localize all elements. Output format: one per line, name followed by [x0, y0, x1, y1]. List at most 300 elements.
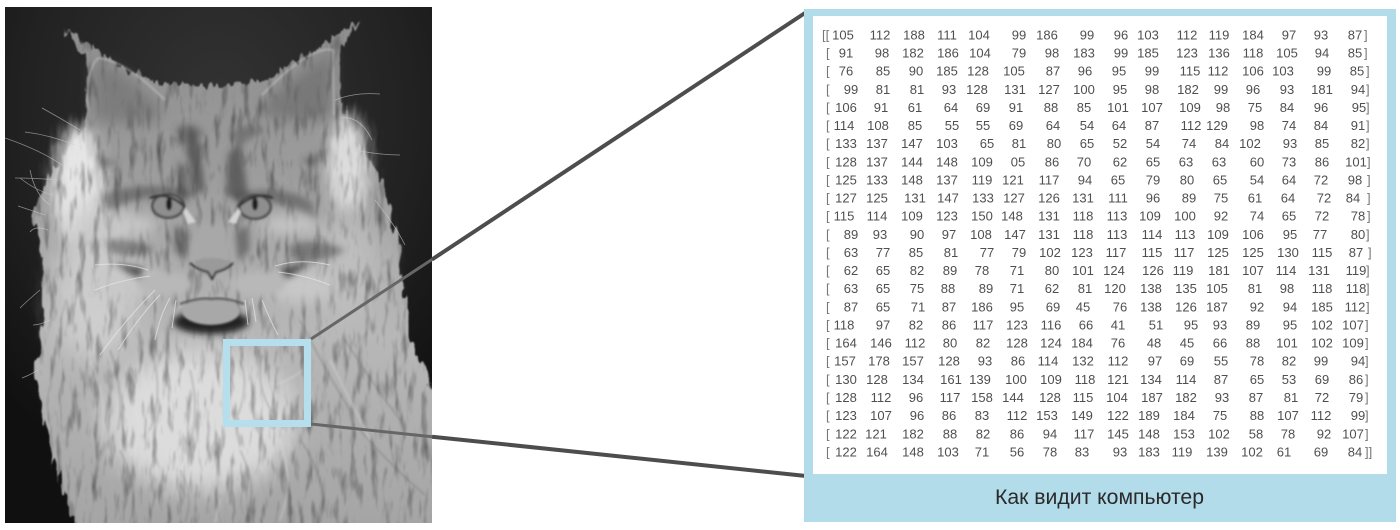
matrix numbers: 105 [1206, 281, 1228, 296]
matrix brackets: ] [1366, 118, 1370, 133]
matrix numbers: 113 [1107, 209, 1127, 224]
matrix brackets: [ [826, 82, 830, 97]
matrix numbers: 74 [1282, 118, 1296, 133]
matrix numbers: 77 [1313, 227, 1327, 242]
matrix numbers: 114 [1176, 372, 1196, 387]
matrix numbers: 99 [1314, 354, 1328, 369]
matrix numbers: 93 [978, 354, 992, 369]
matrix numbers: 87 [1214, 372, 1228, 387]
matrix numbers: 145 [1107, 426, 1129, 441]
matrix numbers: 107 [1141, 100, 1163, 115]
matrix numbers: 138 [1140, 299, 1162, 314]
matrix numbers: 103 [1272, 64, 1294, 79]
matrix numbers: 93 [1280, 82, 1294, 97]
matrix numbers: 05 [1011, 154, 1025, 169]
matrix numbers: 122 [835, 426, 857, 441]
matrix numbers: 118 [1346, 281, 1366, 296]
matrix brackets: ] [1365, 390, 1369, 405]
muzzle [112, 262, 312, 296]
matrix brackets: [ [826, 118, 830, 133]
matrix numbers: 85 [1077, 100, 1091, 115]
matrix numbers: 121 [865, 426, 887, 441]
matrix brackets: ] [1367, 172, 1371, 187]
matrix numbers: 86 [942, 408, 956, 423]
matrix numbers: 89 [1182, 191, 1196, 206]
nose bridge [197, 222, 230, 260]
matrix numbers: 134 [1140, 372, 1162, 387]
chin and dark shadow [173, 297, 249, 334]
matrix brackets: ]] [1365, 444, 1372, 459]
matrix numbers: 125 [1207, 245, 1229, 260]
matrix numbers: 184 [1242, 27, 1264, 42]
matrix numbers: 119 [1173, 263, 1193, 278]
matrix numbers: 118 [1073, 227, 1093, 242]
matrix numbers: 80 [943, 336, 957, 351]
matrix numbers: 91 [1351, 118, 1365, 133]
matrix numbers: 132 [1072, 354, 1094, 369]
matrix numbers: 119 [1346, 263, 1366, 278]
matrix numbers: 96 [1314, 100, 1328, 115]
matrix brackets: ] [1366, 281, 1370, 296]
matrix numbers: 131 [1038, 209, 1060, 224]
matrix numbers: 71 [1010, 281, 1024, 296]
matrix numbers: 81 [1012, 136, 1026, 151]
matrix numbers: 65 [876, 281, 890, 296]
matrix numbers: 135 [1175, 281, 1197, 296]
matrix brackets: ] [1365, 354, 1369, 369]
matrix numbers: 189 [1138, 408, 1160, 423]
matrix numbers: 102 [1311, 336, 1333, 351]
matrix numbers: 137 [936, 172, 958, 187]
matrix numbers: 108 [970, 227, 992, 242]
matrix numbers: 107 [1342, 426, 1364, 441]
matrix numbers: 85 [908, 118, 922, 133]
matrix numbers: 107 [1242, 263, 1264, 278]
matrix numbers: 99 [1351, 408, 1365, 423]
matrix numbers: 181 [1208, 263, 1230, 278]
matrix numbers: 112 [870, 27, 890, 42]
matrix numbers: 123 [1006, 318, 1028, 332]
matrix numbers: 79 [1012, 46, 1026, 60]
matrix numbers: 115 [834, 209, 854, 224]
face light patches [100, 216, 335, 303]
matrix brackets: ] [1367, 191, 1371, 206]
matrix numbers: 128 [835, 154, 857, 169]
matrix numbers: 126 [1038, 191, 1060, 206]
matrix numbers: 102 [1239, 136, 1261, 151]
matrix numbers: 95 [1113, 82, 1127, 97]
matrix numbers: 101 [1072, 263, 1094, 278]
matrix numbers: 114 [1142, 227, 1162, 242]
matrix numbers: 88 [941, 281, 955, 296]
matrix numbers: 99 [1080, 27, 1094, 42]
matrix numbers: 93 [942, 82, 956, 97]
matrix numbers: 77 [980, 245, 994, 260]
matrix numbers: 133 [835, 136, 857, 151]
matrix numbers: 107 [1342, 318, 1364, 332]
matrix brackets: ] [1368, 245, 1372, 260]
matrix numbers: 75 [1248, 100, 1262, 115]
matrix brackets: ] [1366, 227, 1370, 242]
matrix numbers: 118 [834, 318, 854, 332]
matrix numbers: 98 [1348, 172, 1362, 187]
matrix numbers: 112 [905, 336, 925, 351]
matrix numbers: 81 [1248, 281, 1262, 296]
matrix numbers: 87 [1349, 245, 1363, 260]
matrix numbers: 99 [1114, 46, 1128, 60]
matrix numbers: 149 [1071, 408, 1093, 423]
matrix numbers: 97 [942, 227, 956, 242]
matrix numbers: 128 [966, 82, 988, 97]
matrix numbers: 186 [971, 299, 993, 314]
matrix brackets: ] [1366, 299, 1370, 314]
matrix numbers: 125 [835, 172, 857, 187]
matrix numbers: 69 [976, 100, 990, 115]
matrix numbers: 78 [975, 263, 989, 278]
matrix numbers: 82 [1351, 136, 1365, 151]
matrix numbers: 109 [1139, 209, 1161, 224]
matrix numbers: 100 [1005, 372, 1027, 387]
matrix numbers: 66 [1213, 336, 1227, 351]
matrix numbers: 112 [1208, 64, 1228, 79]
matrix numbers: 94 [1351, 354, 1365, 369]
matrix numbers: 89 [979, 281, 993, 296]
matrix numbers: 61 [1248, 191, 1262, 206]
matrix numbers: 93 [1113, 444, 1127, 459]
matrix numbers: 69 [1180, 354, 1194, 369]
matrix numbers: 112 [1177, 27, 1197, 42]
matrix numbers: 187 [1206, 299, 1228, 314]
matrix numbers: 80 [1351, 227, 1365, 242]
matrix numbers: 97 [1148, 354, 1162, 369]
matrix numbers: 85 [876, 64, 890, 79]
matrix numbers: 127 [1038, 82, 1060, 97]
matrix numbers: 112 [1108, 354, 1128, 369]
matrix numbers: 131 [1308, 263, 1330, 278]
matrix numbers: 72 [1315, 209, 1329, 224]
matrix numbers: 78 [1281, 426, 1295, 441]
matrix numbers: 63 [844, 245, 858, 260]
matrix numbers: 98 [1250, 118, 1264, 133]
matrix brackets: ] [1366, 136, 1370, 151]
matrix brackets: [ [826, 172, 830, 187]
matrix brackets: ] [1366, 82, 1370, 97]
matrix numbers: 157 [902, 354, 924, 369]
matrix brackets: [ [826, 281, 830, 296]
matrix numbers: 88 [1044, 100, 1058, 115]
matrix numbers: 130 [1277, 245, 1299, 260]
matrix numbers: 99 [1012, 27, 1026, 42]
matrix numbers: 128 [1006, 336, 1028, 351]
matrix numbers: 86 [1010, 426, 1024, 441]
matrix numbers: 119 [1209, 27, 1229, 42]
matrix numbers: 131 [904, 191, 926, 206]
matrix numbers: 106 [1242, 227, 1264, 242]
matrix numbers: 55 [1214, 354, 1228, 369]
matrix numbers: 78 [1043, 444, 1057, 459]
matrix brackets [822, 27, 1372, 459]
matrix numbers: 139 [1206, 444, 1228, 459]
matrix numbers: 115 [1180, 64, 1200, 79]
matrix brackets: [ [826, 263, 830, 278]
matrix numbers: 115 [1142, 245, 1162, 260]
matrix numbers: 96 [909, 390, 923, 405]
matrix numbers: 62 [844, 263, 858, 278]
matrix brackets: ] [1365, 336, 1369, 351]
matrix numbers: 100 [1174, 209, 1196, 224]
matrix numbers: 182 [1177, 82, 1199, 97]
matrix numbers: 92 [1214, 209, 1228, 224]
matrix numbers: 61 [1277, 444, 1291, 459]
matrix numbers: 69 [1314, 444, 1328, 459]
matrix numbers: 86 [1045, 154, 1059, 169]
matrix numbers: 64 [944, 100, 958, 115]
matrix numbers: 71 [1010, 263, 1024, 278]
matrix numbers: 182 [902, 46, 924, 60]
matrix brackets: ] [1367, 154, 1371, 169]
matrix numbers: 79 [1146, 172, 1160, 187]
matrix numbers: 115 [1073, 390, 1093, 405]
matrix numbers: 90 [909, 64, 923, 79]
matrix numbers: 183 [1138, 444, 1160, 459]
matrix numbers: 98 [1280, 281, 1294, 296]
matrix numbers: 41 [1111, 318, 1125, 332]
cat silhouette with fur texture [32, 20, 440, 530]
matrix numbers: 181 [1311, 82, 1333, 97]
matrix numbers: 91 [874, 100, 888, 115]
matrix numbers: 87 [844, 299, 858, 314]
matrix numbers: 85 [1348, 46, 1362, 60]
matrix numbers: 60 [1250, 154, 1264, 169]
matrix numbers: 63 [844, 281, 858, 296]
matrix numbers: 69 [1315, 372, 1329, 387]
ears inner shading [92, 50, 332, 125]
matrix numbers: 148 [936, 154, 958, 169]
matrix brackets: ] [1366, 100, 1370, 115]
matrix numbers: 69 [1009, 118, 1023, 133]
matrix numbers: 125 [866, 191, 888, 206]
matrix numbers: 85 [1350, 64, 1364, 79]
matrix numbers: 128 [1039, 390, 1061, 405]
photo background [5, 7, 432, 523]
matrix numbers: 87 [942, 299, 956, 314]
matrix numbers: 72 [1314, 172, 1328, 187]
matrix numbers: 65 [1146, 154, 1160, 169]
matrix numbers: 95 [1283, 318, 1297, 332]
matrix numbers: 96 [1078, 64, 1092, 79]
matrix numbers: 109 [1179, 100, 1201, 115]
matrix numbers: 89 [1246, 318, 1260, 332]
matrix numbers: 53 [1282, 372, 1296, 387]
matrix numbers: 88 [1250, 408, 1264, 423]
matrix numbers: 89 [844, 227, 858, 242]
matrix numbers: 109 [901, 209, 923, 224]
matrix numbers: 65 [980, 136, 994, 151]
matrix brackets: [ [826, 154, 830, 169]
matrix numbers: 106 [1242, 64, 1264, 79]
matrix brackets: ] [1365, 426, 1369, 441]
matrix numbers: 84 [1215, 136, 1229, 151]
matrix brackets: [ [826, 372, 830, 387]
matrix numbers: 187 [1141, 390, 1163, 405]
matrix numbers: 74 [1182, 136, 1196, 151]
matrix numbers: 117 [1074, 426, 1094, 441]
matrix numbers: 131 [1038, 227, 1060, 242]
matrix numbers: 54 [1146, 136, 1160, 151]
matrix numbers: 65 [1250, 372, 1264, 387]
matrix numbers: 94 [1283, 299, 1297, 314]
matrix numbers: 51 [1149, 318, 1163, 332]
matrix numbers: 87 [1348, 27, 1362, 42]
left eye [150, 193, 196, 224]
matrix numbers: 153 [1173, 426, 1195, 441]
matrix brackets: [ [826, 245, 830, 260]
matrix brackets: ] [1364, 27, 1368, 42]
matrix numbers: 99 [1145, 64, 1159, 79]
matrix numbers: 138 [1140, 281, 1162, 296]
matrix numbers: 84 [1314, 118, 1328, 133]
matrix brackets: ] [1364, 46, 1368, 60]
matrix numbers: 134 [902, 372, 924, 387]
matrix numbers: 48 [1147, 336, 1161, 351]
matrix numbers: 93 [1314, 27, 1328, 42]
matrix numbers: 104 [968, 27, 990, 42]
matrix numbers: 95 [1010, 299, 1024, 314]
matrix numbers: 105 [1003, 64, 1025, 79]
matrix numbers: 144 [901, 154, 923, 169]
matrix numbers: 85 [1315, 136, 1329, 151]
matrix numbers: 100 [1073, 82, 1095, 97]
matrix numbers: 120 [1104, 281, 1126, 296]
matrix numbers: 124 [1040, 336, 1062, 351]
matrix numbers: 112 [1007, 408, 1027, 423]
matrix numbers: 89 [943, 263, 957, 278]
matrix numbers: 147 [901, 136, 923, 151]
matrix numbers: 54 [1250, 172, 1264, 187]
matrix numbers: 80 [1180, 172, 1194, 187]
matrix brackets: [ [826, 100, 830, 115]
matrix numbers: 104 [1106, 390, 1128, 405]
matrix numbers: 164 [835, 336, 857, 351]
matrix numbers: 86 [942, 318, 956, 332]
matrix numbers: 81 [944, 245, 958, 260]
stray side hairs [5, 94, 405, 378]
matrix numbers: 118 [1073, 209, 1093, 224]
matrix numbers: 133 [972, 191, 994, 206]
matrix numbers: 114 [1038, 354, 1058, 369]
matrix numbers: 112 [1311, 408, 1331, 423]
matrix numbers: 92 [1317, 426, 1331, 441]
matrix numbers: 128 [866, 372, 888, 387]
matrix numbers: 109 [1342, 336, 1364, 351]
matrix numbers: 73 [1282, 154, 1296, 169]
matrix numbers: 76 [839, 64, 853, 79]
right eye [228, 194, 273, 224]
matrix numbers: 133 [866, 172, 888, 187]
matrix numbers: 122 [1107, 408, 1129, 423]
matrix numbers: 102 [1039, 245, 1061, 260]
matrix brackets: [ [826, 336, 830, 351]
matrix numbers: 148 [901, 172, 923, 187]
matrix numbers: 108 [867, 118, 889, 133]
matrix numbers: 93 [1283, 136, 1297, 151]
matrix numbers: 185 [1311, 299, 1333, 314]
matrix numbers: 94 [1351, 82, 1365, 97]
matrix numbers: 117 [940, 390, 960, 405]
matrix numbers: 148 [902, 444, 924, 459]
matrix numbers: 74 [1250, 209, 1264, 224]
matrix numbers: 118 [1075, 372, 1095, 387]
matrix numbers: 99 [1317, 64, 1331, 79]
matrix numbers: 72 [1315, 390, 1329, 405]
matrix numbers: 113 [1175, 227, 1195, 242]
matrix numbers: 105 [1276, 46, 1298, 60]
matrix numbers: 77 [876, 245, 890, 260]
matrix numbers: 102 [1311, 318, 1333, 332]
matrix numbers: 99 [844, 82, 858, 97]
matrix numbers: 122 [835, 444, 857, 459]
matrix numbers: 148 [1138, 426, 1160, 441]
matrix numbers: 64 [1281, 191, 1295, 206]
matrix numbers: 45 [1076, 299, 1090, 314]
forehead stripes and face markings [95, 124, 345, 262]
matrix numbers: 129 [1206, 118, 1228, 133]
matrix numbers: 64 [1282, 172, 1296, 187]
matrix numbers: 102 [1208, 426, 1230, 441]
matrix numbers: 84 [1348, 444, 1362, 459]
matrix numbers: 55 [945, 118, 959, 133]
matrix numbers: 82 [976, 426, 990, 441]
matrix numbers: 69 [1046, 299, 1060, 314]
matrix numbers: 86 [1011, 354, 1025, 369]
matrix numbers: 95 [1283, 227, 1297, 242]
matrix brackets: [[ [822, 27, 830, 42]
matrix numbers: 137 [866, 136, 888, 151]
matrix numbers: 93 [873, 227, 887, 242]
matrix numbers: 184 [1173, 408, 1195, 423]
matrix numbers: 150 [971, 209, 993, 224]
matrix brackets: ] [1365, 408, 1369, 423]
matrix numbers: 182 [1175, 390, 1197, 405]
matrix numbers: 95 [1352, 100, 1366, 115]
matrix numbers: 103 [936, 136, 958, 151]
chest fur locks [110, 320, 425, 523]
matrix numbers: 147 [937, 191, 959, 206]
matrix numbers: 178 [868, 354, 890, 369]
matrix numbers: 123 [1071, 245, 1093, 260]
matrix numbers: 112 [1181, 118, 1201, 133]
matrix numbers: 131 [1072, 191, 1094, 206]
nose [190, 258, 233, 281]
pixel value matrix [822, 27, 1372, 459]
matrix numbers: 75 [1214, 191, 1228, 206]
matrix numbers: 101 [1345, 154, 1367, 169]
matrix numbers: 147 [1004, 227, 1026, 242]
matrix numbers: 93 [1213, 318, 1227, 332]
matrix numbers: 95 [1184, 318, 1198, 332]
matrix numbers: 104 [969, 46, 991, 60]
matrix numbers: 91 [1009, 100, 1023, 115]
matrix numbers: 98 [1145, 82, 1159, 97]
matrix numbers: 96 [1246, 82, 1260, 97]
matrix numbers: 65 [876, 299, 890, 314]
matrix numbers: 118 [1312, 281, 1332, 296]
matrix numbers: 98 [1216, 100, 1230, 115]
matrix numbers: 76 [1113, 299, 1127, 314]
matrix numbers: 79 [1349, 390, 1363, 405]
matrix numbers: 158 [971, 390, 993, 405]
matrix numbers: 114 [834, 118, 854, 133]
